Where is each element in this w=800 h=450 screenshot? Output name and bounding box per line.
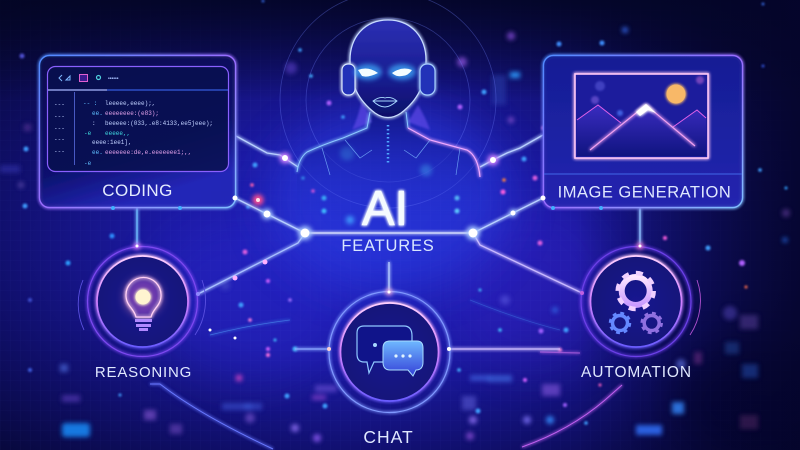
figure: AI humanoid: [297, 20, 480, 215]
label: chat: CHAT: [363, 427, 414, 447]
panel: coding: [40, 56, 236, 208]
label: image generation: IMAGE GENERATION: [558, 184, 731, 202]
code window: ---: [54, 101, 65, 108]
subtitle: features: FEATURES: [341, 237, 435, 255]
hair strands: [352, 100, 430, 130]
code window: :: [92, 120, 96, 127]
head: [350, 20, 426, 118]
code window: ---: [54, 125, 65, 132]
icon: landscape picture: [575, 74, 708, 158]
code window: ee.: [92, 110, 103, 117]
eyes: [354, 64, 382, 80]
shoulder outlines: [297, 112, 408, 172]
code window: -e: [84, 130, 92, 137]
code window: beeeee:(033,.e8:4133,ee5jeee);: [105, 120, 213, 127]
code window: eeeeeeee:(e83);: [105, 110, 159, 117]
headphones: [342, 64, 355, 95]
connector lines: [137, 135, 640, 449]
icon: light bulb: [126, 278, 161, 331]
label: reasoning: REASONING: [95, 364, 192, 381]
code window: -e: [84, 160, 92, 167]
code window: eeeeeee:de,e.eeeeeee1;,,: [105, 149, 191, 156]
feature: automation: [581, 246, 700, 381]
icon: gears: [610, 273, 662, 333]
code window: leeeee,eeee);,: [105, 100, 155, 107]
code window: [48, 66, 228, 172]
title: AI: AI: [362, 182, 408, 236]
panel: image generation: [544, 56, 742, 208]
label: automation: AUTOMATION: [581, 364, 692, 381]
label: coding: CODING: [102, 181, 173, 200]
code window: ••••••: [108, 76, 119, 82]
icon: chat bubbles: [357, 326, 423, 376]
torso fill: [297, 112, 480, 215]
code window: ---: [54, 148, 65, 155]
code window: eeeee,,: [105, 130, 130, 137]
code window: -- :: [83, 100, 97, 107]
code window: ---: [54, 113, 65, 120]
code window: ---: [54, 136, 65, 143]
code window: eeee:1ee1],: [92, 139, 132, 146]
orbit rings behind the figure: [280, 0, 496, 208]
mouth: [373, 97, 397, 107]
feature: reasoning: [78, 246, 205, 381]
feature: chat: [329, 292, 450, 447]
connector nodes: [111, 152, 644, 351]
code window: ee.: [92, 149, 103, 156]
